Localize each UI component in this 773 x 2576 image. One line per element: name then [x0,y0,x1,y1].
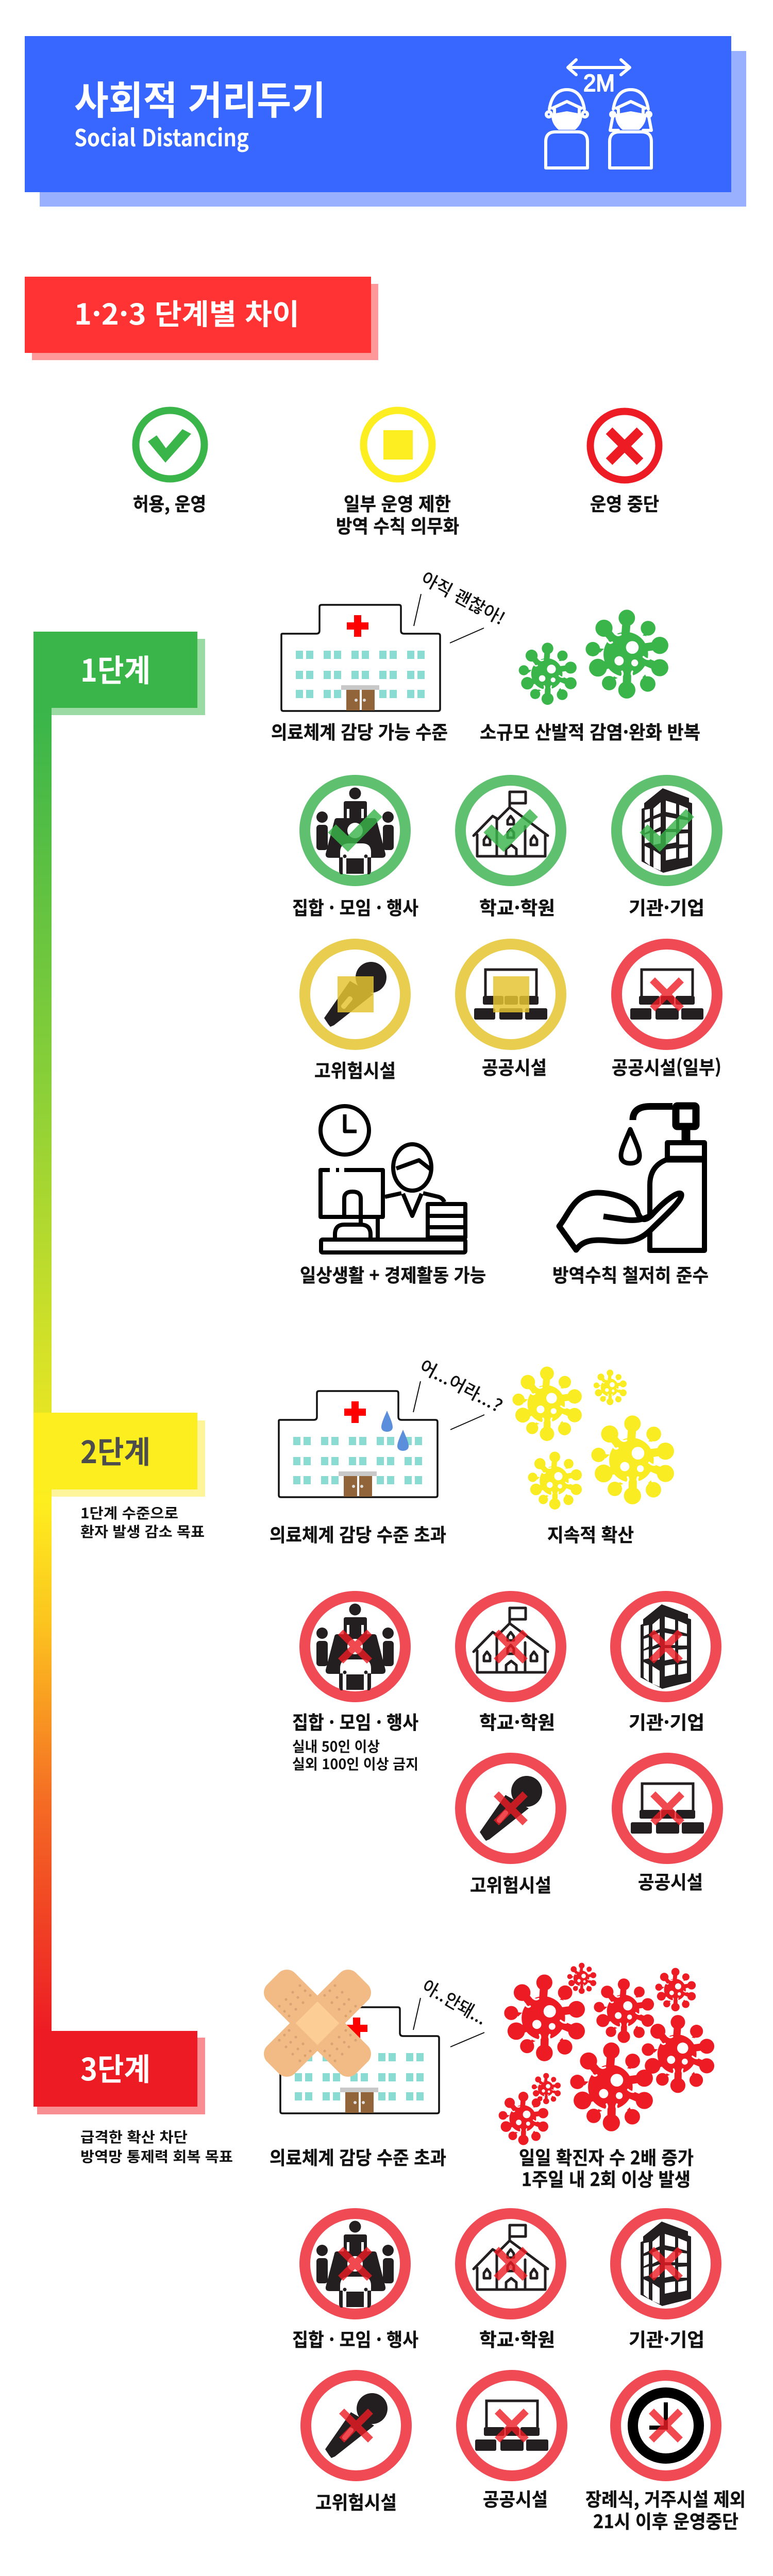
legend: suspended [590,411,659,516]
level 3 viruses [499,1963,714,2192]
icon: two masked people two metres apart: 2M [583,70,615,96]
level 3 goal note: 방역망 통제력 회복 목표 [80,2146,233,2166]
level 2: public facilities banned [617,1758,717,1894]
level 3: gatherings banned [292,2213,418,2352]
level 1: some public facilities suspended: 공공시설(일부) [612,1053,721,1080]
level 1: high-risk facilities restricted: 고위험시설 [314,1056,396,1083]
level 3: public facilities banned [462,2375,562,2512]
level 1: some public facilities suspended [612,944,721,1080]
level 1: high-risk facilities restricted [305,944,405,1083]
legend: suspended: 운영 중단 [590,489,659,516]
icon: hand under sanitiser pump [552,1106,709,1287]
icon: crossed bandage [259,1965,376,2081]
level 1: public facilities restricted [461,944,561,1080]
level 3 hospital with bandage [259,1965,492,2170]
level 2 goal note [80,1502,205,1541]
level 3: gatherings banned: 집합 · 모임 · 행사 [292,2325,418,2352]
subtitle: Social Distancing [74,120,249,154]
icon: office worker at desk: 일상생활 + 경제활동 가능 [300,1261,486,1287]
level 3 goal note: 급격한 확산 차단 [80,2126,188,2147]
legend: partial restriction: 일부 운영 제한 [344,489,451,516]
level 2: high-risk facilities banned [461,1758,561,1897]
level 3: institutions banned: 기관·기업 [629,2325,704,2352]
title: 사회적 거리두기 [74,69,326,126]
level 1 viruses: 소규모 산발적 감염·완화 반복 [480,718,700,744]
level 1: institutions allowed [616,780,717,920]
level 3: public facilities banned: 공공시설 [483,2485,548,2512]
level 1 hospital: 아직 괜찮아! [417,565,510,630]
level 3: night closure: 21시 이후 운영중단 [593,2507,738,2534]
level 1: schools allowed: 학교·학원 [479,893,555,920]
icon: hand under sanitiser pump: 방역수칙 철저히 준수 [552,1261,709,1287]
level 2: schools banned: 학교·학원 [479,1708,555,1735]
level 3 tag [33,2031,197,2107]
legend: allowed [133,410,206,516]
legend: allowed: 허용, 운영 [133,489,206,516]
level 3: high-risk facilities banned [306,2375,406,2515]
level 2 goal note: 환자 발생 감소 목표 [80,1521,205,1541]
level 2: gatherings banned: 실내 50인 이상 [292,1736,380,1756]
level 3: schools banned [461,2213,561,2352]
level 2: gatherings banned: 실외 100인 이상 금지 [292,1753,418,1774]
level 2 hospital: 어...어라...? [416,1352,508,1417]
legend: partial restriction: 방역 수칙 의무화 [336,512,459,538]
level 2: gatherings banned [292,1596,418,1774]
level 3 hospital with bandage: 아..안돼... [418,1973,492,2030]
level 3 hospital with bandage: 의료체계 감당 수준 초과 [270,2143,446,2170]
level 2: high-risk facilities banned: 고위험시설 [470,1871,551,1897]
level 3 tag: 3단계 [80,2045,150,2090]
level 3 viruses: 1주일 내 2회 이상 발생 [522,2165,691,2192]
level 2 viruses: 지속적 확산 [547,1520,634,1547]
level 2: institutions banned [615,1596,716,1735]
level 2 viruses [512,1366,674,1547]
level 1 tag: 1단계 [80,646,150,691]
level 2: gatherings banned: 집합 · 모임 · 행사 [292,1708,418,1735]
level 2 tag [33,1413,197,1489]
level 2: institutions banned: 기관·기업 [629,1708,704,1735]
level 1 hospital: 의료체계 감당 가능 수준 [271,718,448,744]
level 1 tag [33,632,197,708]
level 2 hospital [270,1352,508,1547]
level 3 viruses: 일일 확진자 수 2배 증가 [519,2143,694,2170]
header banner [25,36,746,207]
timeline: gradient bar with level tags [33,632,205,2114]
level 1: gatherings allowed [292,780,418,920]
level 1: gatherings allowed: 집합 · 모임 · 행사 [292,893,418,920]
section heading: differences by level: 1·2·3 단계별 차이 [74,292,299,333]
level 2 tag: 2단계 [80,1428,150,1472]
level 2 hospital: 의료체계 감당 수준 초과 [270,1520,446,1547]
level 3: night closure [585,2375,746,2534]
icon: two masked people two metres apart [546,60,651,168]
level 2: schools banned [461,1596,561,1735]
level 3 goal note [80,2126,233,2166]
level 1: institutions allowed: 기관·기업 [629,893,704,920]
level 1: schools allowed [461,780,561,920]
level 1 viruses [480,609,700,744]
icon: office worker at desk [300,1106,486,1287]
section heading: differences by level [25,277,378,360]
level 3: schools banned: 학교·학원 [479,2325,555,2352]
level 3: institutions banned [615,2213,716,2352]
level 3: high-risk facilities banned: 고위험시설 [315,2488,397,2515]
level 3: night closure: 장례식, 거주시설 제외 [585,2485,746,2512]
level 2: public facilities banned: 공공시설 [638,1868,703,1894]
level 1: public facilities restricted: 공공시설 [482,1053,547,1080]
legend: partial restriction [336,410,459,538]
level 1 hospital [271,565,510,744]
level 2 goal note: 1단계 수준으로 [80,1502,178,1523]
